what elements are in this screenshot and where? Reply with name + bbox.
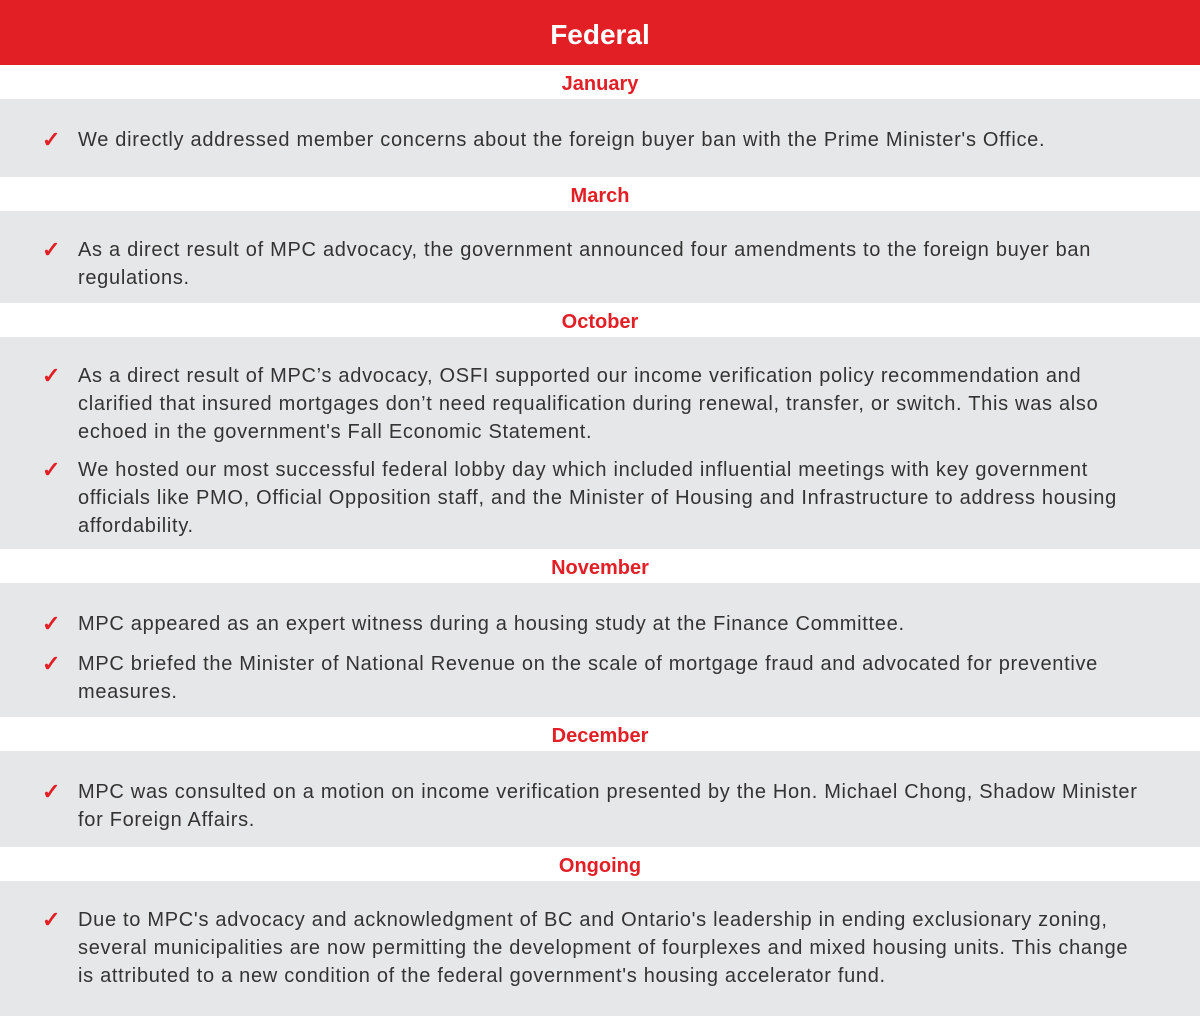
panel: March: ✓	[42, 237, 60, 262]
panel: November: ✓	[42, 611, 60, 636]
item	[42, 237, 1091, 289]
heading: December: December	[552, 725, 648, 747]
panel: January	[0, 99, 1200, 177]
title	[0, 0, 1200, 65]
item: is attributed to a new condition of the federal government's housing accelerator fund.	[78, 965, 886, 987]
item: As a direct result of MPC advocacy, the government announced four amendments to the foreign buyer ban	[78, 239, 1091, 261]
title: Federal	[550, 19, 650, 50]
panel: October: ✓	[42, 363, 60, 388]
item: Due to MPC's advocacy and acknowledgment of BC and Ontario's leadership in ending exclusionary zoning,	[78, 909, 1108, 931]
item: clarified that insured mortgages don’t need requalification during renewal, transfer, or switch. This was also	[78, 393, 1098, 415]
panel: January: ✓	[42, 127, 60, 152]
heading: January: January	[562, 73, 638, 95]
item: As a direct result of MPC’s advocacy, OSFI supported our income verification policy recommendation and	[78, 365, 1081, 387]
panel: Ongoing	[0, 881, 1200, 1016]
panel: December	[0, 751, 1200, 847]
item: officials like PMO, Official Opposition staff, and the Minister of Housing and Infrastructure to address housing	[78, 487, 1117, 509]
panel: October: ✓	[42, 457, 60, 482]
heading: March: March	[571, 185, 629, 207]
heading: October: October	[562, 311, 638, 333]
item	[42, 457, 1117, 537]
item: echoed in the government's Fall Economic Statement.	[78, 421, 592, 443]
panel: Ongoing: ✓	[42, 907, 60, 932]
item	[42, 363, 1098, 443]
panel: November: ✓	[42, 651, 60, 676]
item: several municipalities are now permitting the development of fourplexes and mixed housing units. This change	[78, 937, 1128, 959]
item: affordability.	[78, 515, 194, 537]
heading: Ongoing: Ongoing	[559, 855, 641, 877]
panel: October	[0, 337, 1200, 549]
item: MPC briefed the Minister of National Revenue on the scale of mortgage fraud and advocated for preventive	[78, 653, 1098, 675]
item	[42, 907, 1128, 987]
item: We hosted our most successful federal lobby day which included influential meetings with key government	[78, 459, 1088, 481]
item: measures.	[78, 681, 178, 703]
item	[42, 651, 1098, 703]
item: for Foreign Affairs.	[78, 809, 255, 831]
item	[42, 779, 1138, 831]
heading: November: November	[551, 557, 649, 579]
item: MPC appeared as an expert witness during a housing study at the Finance Committee.	[78, 613, 905, 635]
panel: March	[0, 211, 1200, 303]
item: We directly addressed member concerns about the foreign buyer ban with the Prime Minister's Office.	[78, 129, 1045, 151]
panel: November	[0, 583, 1200, 717]
item: MPC was consulted on a motion on income verification presented by the Hon. Michael Chong, Shadow Minister	[78, 781, 1138, 803]
item: regulations.	[78, 267, 190, 289]
panel: December: ✓	[42, 779, 60, 804]
